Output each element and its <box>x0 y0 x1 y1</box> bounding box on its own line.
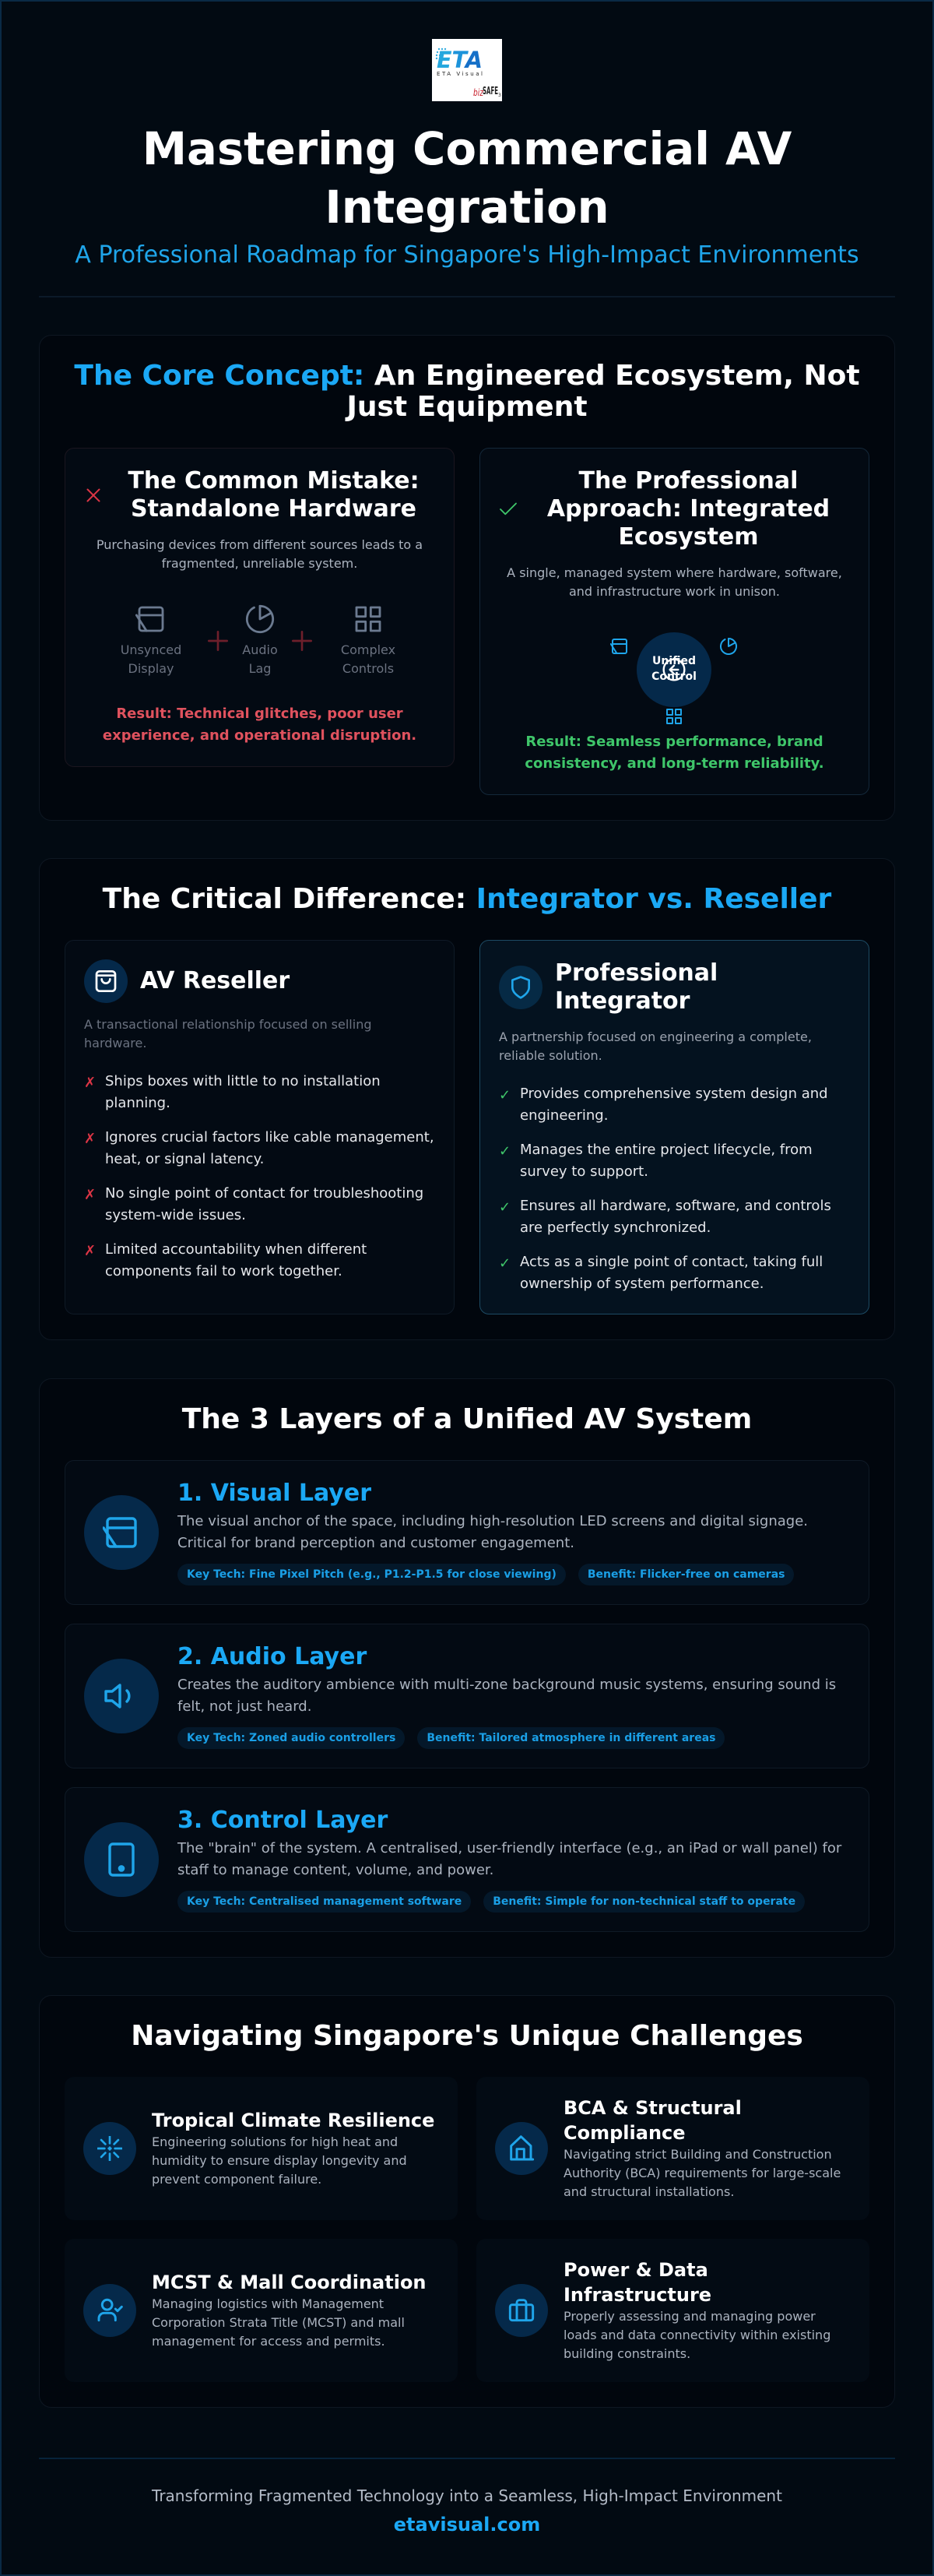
challenges grid <box>83 2097 841 2361</box>
comparison cards <box>65 940 869 1314</box>
list: integrator benefits: ✓ <box>499 1087 511 1103</box>
BCA text: BCA & Structural Compliance <box>564 2097 742 2144</box>
heading: core concept: The Core Concept: An Engineered Ecosystem, Not Just Equipment <box>74 360 860 423</box>
fragmented devices row <box>121 604 395 676</box>
logo: ETA Visual bizSAFE: 3 <box>498 93 501 98</box>
list: reseller drawbacks <box>84 1073 434 1279</box>
icon: briefcase <box>495 2284 548 2337</box>
layer: audio <box>65 1624 869 1768</box>
logo: ETA Visual bizSAFE: ETA <box>437 47 483 73</box>
list: integrator benefits <box>499 1086 831 1292</box>
logo: ETA Visual bizSAFE <box>432 39 502 101</box>
panel: three layers <box>39 1378 895 1958</box>
heading: three layers: The 3 Layers of a Unified AV System <box>182 1403 752 1435</box>
item: audio lag <box>242 604 278 676</box>
item: audio lag: Audio <box>242 642 278 657</box>
icon: display <box>84 1495 159 1570</box>
item: complex controls: Complex <box>341 642 395 657</box>
climate text: Tropical Climate Resilience <box>152 2110 434 2131</box>
card: professional integrator <box>479 940 869 1314</box>
footer tagline: Transforming Fragmented Technology into a Seamless, High-Impact Environment <box>152 2486 782 2505</box>
hub: unified control: Unified <box>652 655 696 667</box>
list: reseller drawbacks: ✗ <box>84 1131 96 1147</box>
text: integrator description: A partnership focused on engineering a complete, reliable solution. <box>499 1029 812 1063</box>
list: integrator benefits: ✓ <box>499 1143 511 1160</box>
hub: unified control <box>637 632 711 707</box>
MCST text: Managing logistics with Management Corporation Strata Title (MCST) and mall management for access and permits. <box>152 2296 405 2349</box>
climate text: Engineering solutions for high heat and humidity to ensure display longevity and prevent component failure. <box>152 2134 407 2187</box>
panel: core concept <box>39 335 895 821</box>
BCA text: Navigating strict Building and Construction Authority (BCA) requirements for large-scale and structural installations. <box>564 2147 841 2199</box>
card heading: common mistake: The Common Mistake: Standalone Hardware <box>128 467 420 523</box>
list: reseller drawbacks: Ignores crucial factors like cable management, heat, or signal latency. <box>105 1129 434 1167</box>
icon: speaker <box>84 1659 159 1733</box>
climate text <box>152 2110 434 2187</box>
audio layer text <box>177 1643 836 1749</box>
logo: ETA Visual bizSAFE: ETA Visual <box>437 71 483 77</box>
list: reseller drawbacks: ✗ <box>84 1075 96 1091</box>
icon: tablet <box>84 1822 159 1897</box>
footer <box>39 2458 895 2537</box>
list: reseller drawbacks: Limited accountability when different components fail to work together. <box>105 1241 367 1279</box>
challenge: MCST coordination <box>65 2239 458 2382</box>
audio layer text: Key Tech: Zoned audio controllers <box>187 1732 395 1744</box>
heading: challenges: Navigating Singapore's Unique Challenges <box>131 2020 803 2052</box>
list: integrator benefits: Manages the entire project lifecycle, from survey to support. <box>520 1142 813 1180</box>
list: integrator benefits: Provides comprehensive system design and engineering. <box>520 1086 828 1124</box>
control layer text: Key Tech: Centralised management software <box>187 1895 462 1908</box>
control layer text: The "brain" of the system. A centralised, user-friendly interface (e.g., an iPad or wall panel) for staff to manage content, volume, and power. <box>177 1840 841 1878</box>
challenge: BCA compliance <box>476 2077 869 2220</box>
icon: green check <box>500 503 517 516</box>
list: integrator benefits: Acts as a single point of contact, taking full ownership of system performance. <box>520 1254 823 1292</box>
list: reseller drawbacks: Ships boxes with little to no installation planning. <box>105 1073 381 1111</box>
MCST text: MCST & Mall Coordination <box>152 2272 427 2293</box>
panel: singapore challenges <box>39 1995 895 2408</box>
icon: user check <box>83 2284 136 2337</box>
integrator header: Professional Integrator <box>555 959 718 1015</box>
layer stack <box>65 1460 869 1932</box>
reseller header: AV Reseller <box>140 967 290 994</box>
audio layer text: 2. Audio Layer <box>177 1643 367 1670</box>
audio layer text: Creates the auditory ambience with multi-zone background music systems, ensuring sound is felt, not just heard. <box>177 1677 836 1715</box>
reseller header <box>84 959 290 1003</box>
text: reseller description: A transactional relationship focused on selling hardware. <box>84 1017 372 1050</box>
power text: Power & Data Infrastructure <box>564 2259 711 2306</box>
visual layer text: The visual anchor of the space, including high-resolution LED screens and digital signage. Critical for brand perception and customer engagement. <box>177 1513 808 1551</box>
card: AV reseller <box>65 940 455 1314</box>
card: professional approach <box>479 448 869 795</box>
list: integrator benefits: Ensures all hardware, software, and controls are perfectly synchronized. <box>520 1198 831 1236</box>
layer: visual <box>65 1460 869 1605</box>
icon: plus <box>292 631 312 651</box>
power text: Properly assessing and managing power loads and data connectivity within existing building constraints. <box>564 2309 830 2361</box>
subtitle: A Professional Roadmap for Singapore's High-Impact Environments <box>75 241 859 269</box>
hub: unified control: Control <box>651 670 697 683</box>
control layer text <box>177 1807 842 1913</box>
heading: critical difference: The Critical Difference: Integrator vs. Reseller <box>103 883 831 915</box>
icon: controls <box>666 709 682 724</box>
item: unsynced display: Display <box>128 661 174 676</box>
result: positive: Result: Seamless performance, brand consistency, and long-term reliability. <box>525 734 824 772</box>
list: integrator benefits: ✓ <box>499 1199 511 1216</box>
power text <box>564 2259 830 2361</box>
card heading: professional approach: The Professional Approach: Integrated Ecosystem <box>547 467 830 551</box>
MCST text <box>152 2272 427 2349</box>
visual layer text: 1. Visual Layer <box>177 1480 371 1507</box>
item: unsynced display <box>121 606 181 676</box>
list: reseller drawbacks: No single point of contact for troubleshooting system-wide issues. <box>105 1185 423 1223</box>
item: complex controls <box>341 606 395 676</box>
list: reseller drawbacks: ✗ <box>84 1243 96 1259</box>
title: Mastering Commercial AV Integration <box>142 123 792 234</box>
icon: plus <box>208 631 228 651</box>
visual layer text: Key Tech: Fine Pixel Pitch (e.g., P1.2-P1.5 for close viewing) <box>187 1568 557 1581</box>
list: reseller drawbacks: ✗ <box>84 1187 96 1203</box>
item: complex controls: Controls <box>342 661 394 676</box>
icon: display <box>610 639 627 654</box>
result: negative: Result: Technical glitches, poor user experience, and operational disruption. <box>103 706 416 744</box>
panel: integrator vs reseller <box>39 858 895 1340</box>
visual layer text: Benefit: Flicker-free on cameras <box>588 1568 785 1581</box>
icon: sun <box>83 2122 136 2175</box>
icon: red cross <box>87 489 100 501</box>
icon: shield <box>499 966 542 1009</box>
footer website: etavisual.com <box>394 2514 540 2536</box>
control layer text: 3. Control Layer <box>177 1807 388 1834</box>
control layer text: Benefit: Simple for non-technical staff to operate <box>493 1895 795 1908</box>
header <box>39 39 895 297</box>
audio layer text: Benefit: Tailored atmosphere in different areas <box>427 1732 715 1744</box>
card: common mistake <box>65 448 455 767</box>
logo: ETA Visual bizSAFE: biz <box>473 87 484 98</box>
item: audio lag: Lag <box>249 661 271 676</box>
unified control diagram <box>610 632 738 724</box>
visual layer text <box>177 1480 808 1585</box>
text: mistake description: Purchasing devices from different sources leads to a fragmented, unreliable system. <box>97 537 423 571</box>
item: unsynced display: Unsynced <box>121 642 181 657</box>
challenge: tropical climate <box>65 2077 458 2220</box>
layer: control <box>65 1787 869 1932</box>
comparison cards <box>65 448 869 795</box>
list: integrator benefits: ✓ <box>499 1255 511 1272</box>
challenge: power and data <box>476 2239 869 2382</box>
icon: audio <box>720 638 738 655</box>
BCA text <box>564 2097 841 2199</box>
icon: building <box>495 2122 548 2175</box>
text: approach description: A single, managed system where hardware, software, and infrastructure work in unison. <box>507 565 842 599</box>
icon: shopping bag <box>84 959 128 1003</box>
